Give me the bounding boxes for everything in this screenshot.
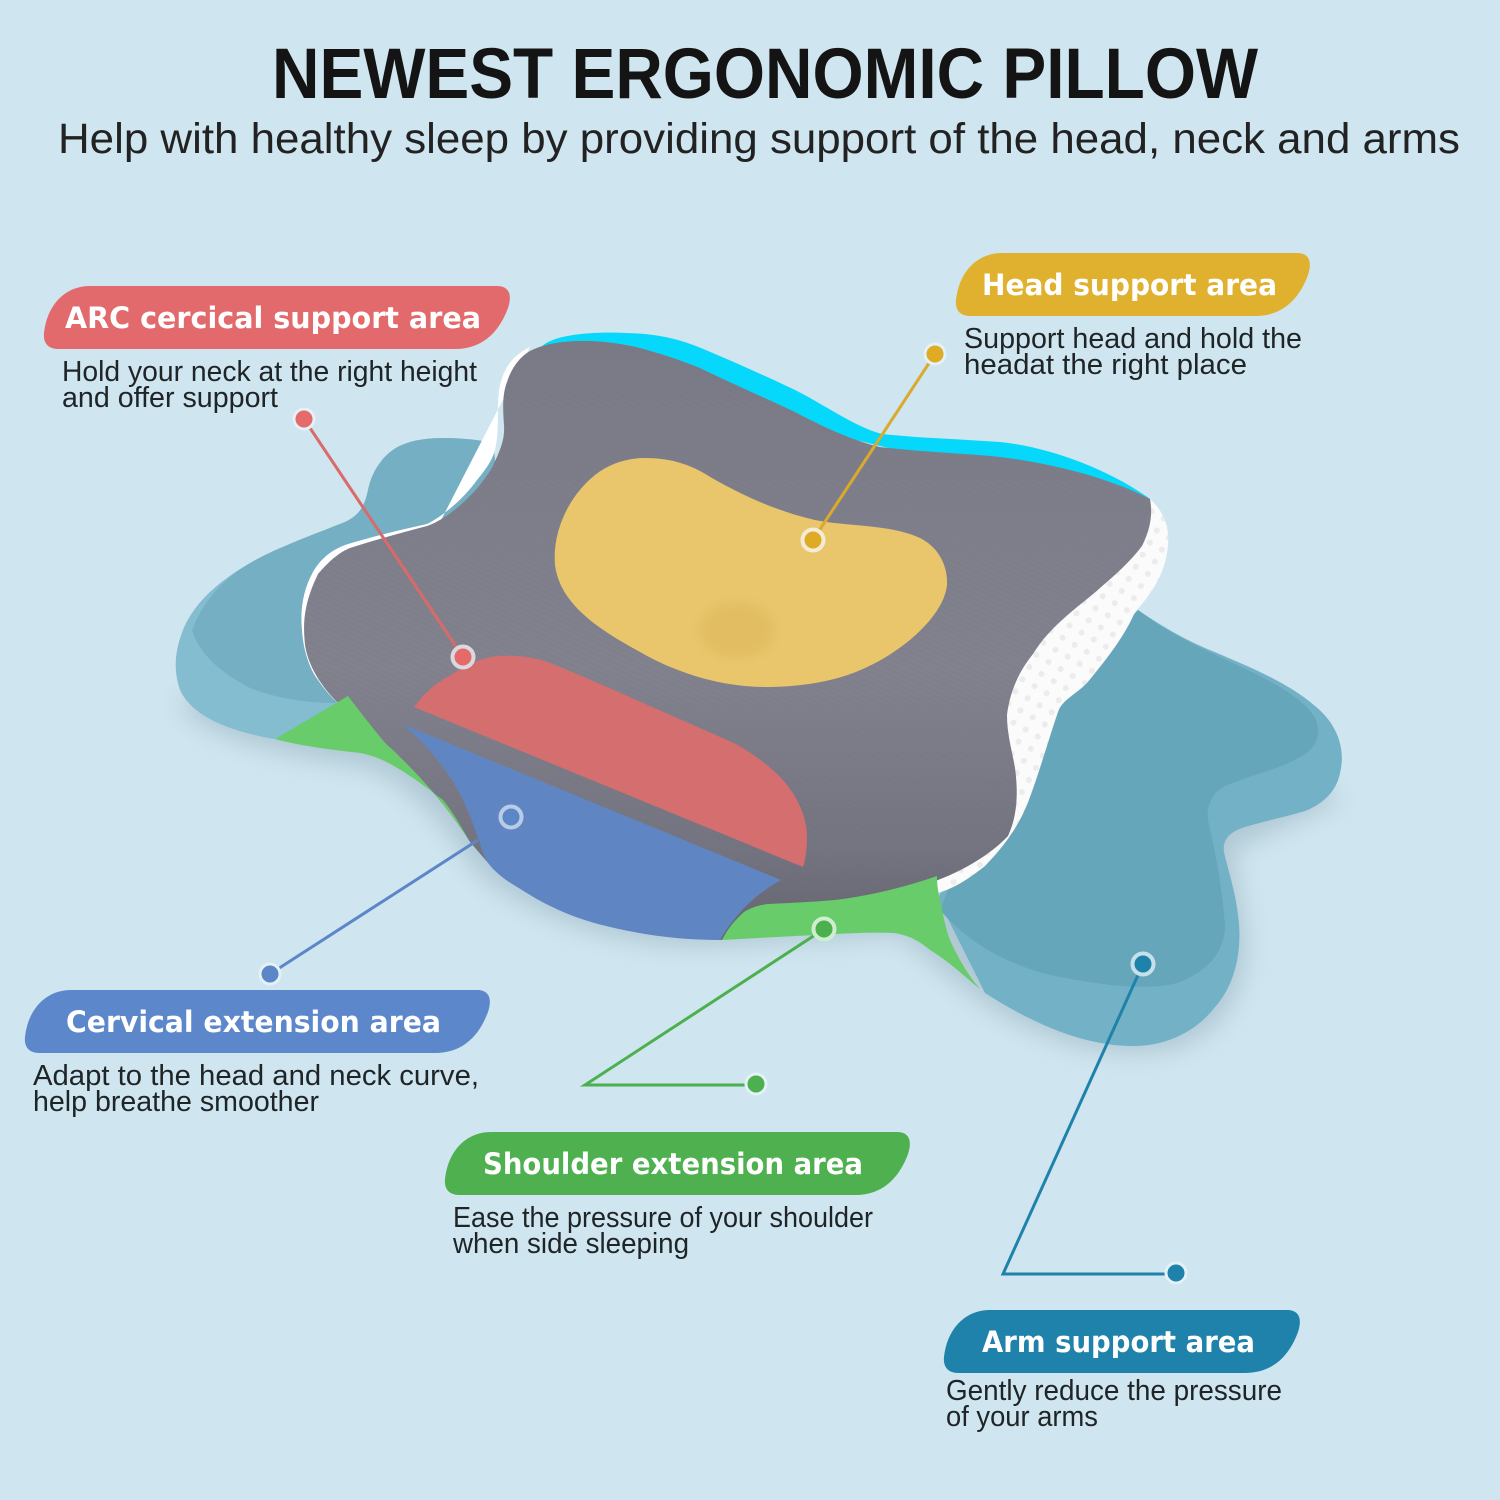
description: Gently reduce the pressure bbox=[946, 1375, 1282, 1407]
description: of your arms bbox=[946, 1401, 1098, 1433]
description: Ease the pressure of your shoulder bbox=[453, 1202, 873, 1234]
label heading: Cervical extension area bbox=[66, 1005, 441, 1039]
label pill bbox=[44, 286, 510, 349]
right arm support wing bbox=[938, 610, 1342, 1046]
head hollow bbox=[699, 602, 775, 658]
label pill bbox=[25, 990, 490, 1053]
description: and offer support bbox=[62, 382, 278, 414]
callout: cervical extension bbox=[260, 806, 522, 984]
description: Support head and hold the bbox=[964, 323, 1302, 355]
gray pillow top bbox=[304, 341, 1151, 940]
label pill bbox=[956, 253, 1310, 316]
panel: head support bbox=[956, 253, 1310, 381]
panel: shoulder extension bbox=[445, 1132, 910, 1260]
left arm support wing bbox=[176, 438, 500, 739]
label pill bbox=[445, 1132, 910, 1195]
drop shadow bbox=[180, 600, 1340, 1053]
label heading: Arm support area bbox=[982, 1325, 1255, 1359]
description: Adapt to the head and neck curve, bbox=[33, 1060, 479, 1092]
description: help breathe smoother bbox=[33, 1086, 319, 1118]
label pill bbox=[944, 1310, 1300, 1373]
label heading: ARC cercical support area bbox=[65, 301, 481, 335]
white left edge bbox=[301, 347, 530, 705]
panel: cervical extension bbox=[25, 990, 490, 1118]
title: NEWEST ERGONOMIC PILLOW bbox=[272, 35, 1258, 114]
description: headat the right place bbox=[964, 349, 1247, 381]
panel: ARC cervical support bbox=[44, 286, 510, 414]
pillow illustration bbox=[176, 333, 1342, 1053]
label heading: Head support area bbox=[982, 268, 1277, 302]
callout: ARC cervical bbox=[294, 409, 474, 668]
head support zone bbox=[555, 458, 947, 687]
left shoulder extension bbox=[275, 696, 470, 842]
description: Hold your neck at the right height bbox=[62, 356, 477, 388]
callout: arm support bbox=[1003, 954, 1186, 1283]
cyan back edge bbox=[530, 333, 1150, 500]
callout: shoulder extension bbox=[585, 918, 834, 1094]
description: when side sleeping bbox=[452, 1228, 689, 1260]
ARC cervical zone bbox=[414, 656, 807, 867]
subtitle: Help with healthy sleep by providing support of the head, neck and arms bbox=[58, 115, 1460, 163]
label heading: Shoulder extension area bbox=[483, 1147, 863, 1181]
cervical extension zone bbox=[402, 724, 781, 940]
panel: arm support bbox=[944, 1310, 1300, 1433]
right shoulder extension bbox=[722, 876, 980, 989]
callout: head support bbox=[802, 344, 945, 550]
white pillow side bbox=[930, 499, 1168, 893]
